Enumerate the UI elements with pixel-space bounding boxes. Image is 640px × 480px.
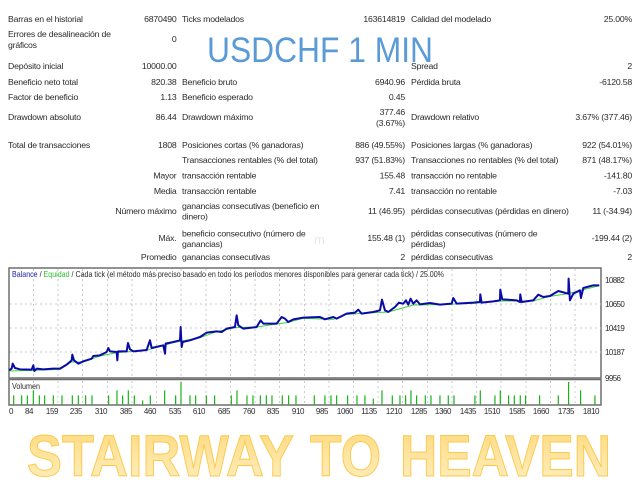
x axis labels: 1360	[435, 407, 452, 416]
row: average trade: -7.03	[613, 186, 632, 196]
row: net profit: Beneficio neto total	[8, 77, 78, 87]
title: USDCHF 1 MIN: USDCHF 1 MIN	[207, 31, 433, 70]
row: max consecutive amount: pérdidas)	[411, 239, 446, 249]
row: drawdown: 377.46	[380, 107, 405, 117]
row: drawdown: (3.67%)	[376, 118, 405, 128]
row: net profit: -6120.58	[599, 77, 632, 87]
x axis labels: 159	[46, 407, 59, 416]
row: chart errors	[8, 29, 177, 50]
row: largest trade: Mayor	[153, 170, 177, 180]
row: deposit and spread: Spread	[411, 61, 438, 71]
row: bars, ticks, quality: 163614819	[363, 14, 405, 24]
row: max consecutive amount: -199.44 (2)	[592, 233, 632, 243]
row: net profit	[8, 77, 632, 87]
x axis labels: 610	[193, 407, 206, 416]
y axis labels: 10882	[605, 276, 625, 285]
row: chart errors: Errores de desalineación de	[8, 29, 111, 39]
row: drawdown: 86.44	[156, 112, 177, 122]
row: total trades	[8, 140, 632, 150]
row: maximum consecutive	[115, 201, 632, 222]
row: max consecutive amount: Máx.	[158, 233, 176, 243]
row: profit factor	[8, 92, 405, 102]
x axis labels: 385	[120, 407, 133, 416]
volume panel	[9, 380, 601, 405]
row: largest trade: -141.80	[604, 170, 632, 180]
x axis labels	[9, 407, 600, 416]
equity and balance lines	[9, 279, 599, 371]
row: deposit and spread: Depósito inicial	[8, 61, 63, 71]
row: largest trade	[153, 170, 632, 180]
row: largest trade: transacción no rentable	[411, 170, 497, 180]
row: profitable trades: Transacciones rentables (% del total)	[182, 155, 318, 165]
x axis labels: 1810	[583, 407, 600, 416]
y axis labels: 10650	[605, 300, 625, 309]
row: max consecutive amount: beneficio consecutivo (número de	[182, 228, 306, 238]
row: average consecutive: ganancias consecutivas	[182, 252, 271, 262]
row: max consecutive amount: pérdidas consecutivas (número de	[411, 228, 538, 238]
x axis labels: 1135	[361, 407, 378, 416]
row: maximum consecutive: pérdidas consecutivas (pérdidas en dinero)	[411, 206, 569, 216]
row: profitable trades	[182, 155, 632, 165]
row: bars, ticks, quality: 25.00%	[604, 14, 632, 24]
row: bars, ticks, quality	[8, 14, 632, 24]
row: largest trade: 155.48	[380, 170, 405, 180]
x axis labels: 310	[95, 407, 108, 416]
volume bars	[14, 382, 595, 404]
x axis labels: 1435	[460, 407, 477, 416]
row: maximum consecutive: ganancias consecutivas (beneficio en	[182, 201, 320, 211]
row: profitable trades: 871 (48.17%)	[582, 155, 632, 165]
row: profitable trades: Transacciones no rentables (% del total)	[411, 155, 558, 165]
x axis labels: 685	[218, 407, 231, 416]
row: max consecutive amount: ganancias)	[182, 239, 223, 249]
x axis labels: 835	[267, 407, 280, 416]
row: average consecutive: pérdidas consecutivas	[411, 252, 494, 262]
row: average consecutive: 2	[400, 252, 405, 262]
statistics table	[8, 14, 632, 262]
row: bars, ticks, quality: 6870490	[144, 14, 177, 24]
row: deposit and spread: 2	[627, 61, 632, 71]
x axis labels: 235	[70, 407, 83, 416]
row: average consecutive: 2	[627, 252, 632, 262]
x axis labels: 535	[169, 407, 182, 416]
row: maximum consecutive: dinero)	[182, 212, 208, 222]
row: average consecutive	[141, 252, 632, 262]
row: average trade: transacción no rentable	[411, 186, 497, 196]
chart legend: Balance / Equidad / Cada tick (el método más preciso basado en todo los períodos menores disponibles para generar cada tick) / 25.00%	[12, 269, 444, 279]
row: drawdown: Drawdown relativo	[411, 112, 479, 122]
banner: STAIRWAY TO HEAVEN	[27, 424, 611, 480]
x axis labels: 910	[292, 407, 305, 416]
row: largest trade: transacción rentable	[182, 170, 257, 180]
row: profit factor: Factor de beneficio	[8, 92, 78, 102]
row: maximum consecutive: Número máximo	[115, 206, 177, 216]
row: bars, ticks, quality: Barras en el historial	[8, 14, 83, 24]
row: maximum consecutive: 11 (46.95)	[368, 206, 405, 216]
y axis labels	[605, 276, 625, 383]
x axis labels: 1510	[484, 407, 501, 416]
row: chart errors: gráficos	[8, 40, 38, 50]
y axis labels: 10419	[605, 324, 625, 333]
row: net profit: 820.38	[151, 77, 177, 87]
row: maximum consecutive: 11 (-34.94)	[592, 206, 632, 216]
x axis labels: 1585	[509, 407, 526, 416]
x axis labels: 1060	[337, 407, 354, 416]
row: profit factor: 0.45	[389, 92, 405, 102]
row: max consecutive amount: 155.48 (1)	[367, 233, 405, 243]
row: total trades: 1808	[158, 140, 177, 150]
row: average trade: 7.41	[389, 186, 405, 196]
row: average trade: transacción rentable	[182, 186, 257, 196]
row: total trades: Posiciones cortas (% ganadoras)	[182, 140, 304, 150]
x axis labels: 460	[144, 407, 157, 416]
row: average trade: Media	[154, 186, 177, 196]
x axis labels: 985	[316, 407, 329, 416]
row: drawdown: Drawdown absoluto	[8, 112, 81, 122]
x axis labels: 1735	[558, 407, 575, 416]
row: total trades: 886 (49.55%)	[355, 140, 405, 150]
row: net profit: Beneficio bruto	[182, 77, 237, 87]
y axis labels: 10187	[605, 348, 625, 357]
volume label: Volumen	[12, 381, 40, 391]
row: profit factor: 1.13	[160, 92, 177, 102]
row: profit factor: Beneficio esperado	[182, 92, 253, 102]
balance chart panel	[9, 268, 601, 378]
row: net profit: Pérdida bruta	[411, 77, 461, 87]
row: average trade	[154, 186, 632, 196]
row: deposit and spread: 10000.00	[142, 61, 177, 71]
row: bars, ticks, quality: Calidad del modelado	[411, 14, 491, 24]
y axis labels: 9956	[605, 374, 622, 383]
row: bars, ticks, quality: Ticks modelados	[182, 14, 245, 24]
x axis labels: 760	[243, 407, 256, 416]
row: chart errors: 0	[172, 34, 177, 44]
row: drawdown: 3.67% (377.46)	[575, 112, 632, 122]
x axis labels: 84	[25, 407, 34, 416]
row: drawdown	[8, 107, 632, 128]
x axis labels: 0	[9, 407, 14, 416]
row: total trades: 922 (54.01%)	[582, 140, 632, 150]
row: drawdown: Drawdown máximo	[182, 112, 253, 122]
row: profitable trades: 937 (51.83%)	[355, 155, 405, 165]
watermark letter: m	[314, 232, 325, 247]
x axis labels: 1210	[386, 407, 403, 416]
row: deposit and spread	[8, 61, 632, 71]
row: average consecutive: Promedio	[141, 252, 177, 262]
x axis labels: 1285	[411, 407, 428, 416]
row: total trades: Total de transacciones	[8, 140, 91, 150]
row: net profit: 6940.96	[375, 77, 405, 87]
row: max consecutive amount	[158, 228, 632, 249]
row: total trades: Posiciones largas (% ganadoras)	[411, 140, 533, 150]
x axis labels: 1660	[533, 407, 550, 416]
